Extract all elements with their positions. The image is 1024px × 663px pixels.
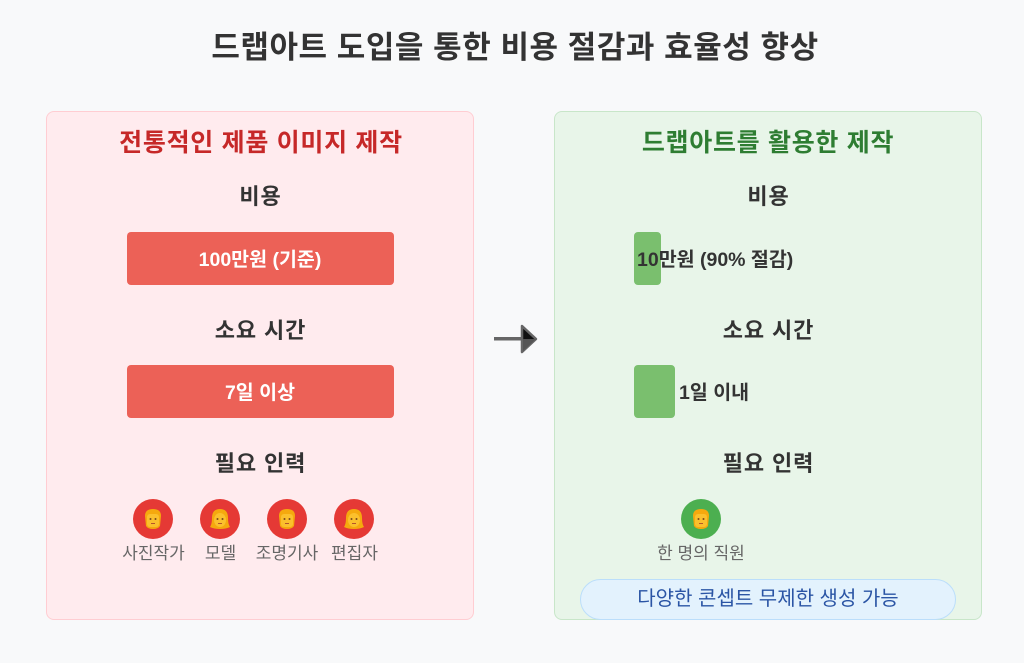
label: lighting technician: 조명기사 xyxy=(256,544,318,563)
label: single employee: 한 명의 직원 xyxy=(657,544,745,563)
arrow xyxy=(494,324,538,354)
bar: dragart cost xyxy=(634,232,661,285)
label: photographer: 사진작가 xyxy=(122,544,185,563)
bar: dragart time xyxy=(634,365,675,418)
icon: photographer xyxy=(133,499,173,539)
callout: unlimited concepts xyxy=(580,579,956,620)
heading: dragart production: 드랩아트를 활용한 제작 xyxy=(642,129,894,157)
heading: traditional staff: 필요 인력 xyxy=(215,451,306,476)
heading: dragart cost: 비용 xyxy=(747,184,790,209)
bar: traditional cost xyxy=(127,232,394,285)
icon: lighting technician xyxy=(267,499,307,539)
title: 드랩아트 도입을 통한 비용 절감과 효율성 향상 xyxy=(211,30,819,65)
heading: traditional production: 전통적인 제품 이미지 제작 xyxy=(119,129,403,157)
panel: traditional production xyxy=(46,111,474,620)
icon: single employee xyxy=(681,499,721,539)
label: editor: 편집자 xyxy=(331,544,378,563)
bar: traditional time xyxy=(127,365,394,418)
bar label: traditional cost: 100만원 (기준) xyxy=(199,249,321,271)
heading: dragart staff: 필요 인력 xyxy=(723,451,814,476)
panel: dragart production xyxy=(554,111,982,620)
heading: dragart time: 소요 시간 xyxy=(723,318,814,343)
bar label: traditional time: 7일 이상 xyxy=(225,382,295,404)
callout: unlimited concepts: 다양한 콘셉트 무제한 생성 가능 xyxy=(637,588,899,610)
heading: traditional time: 소요 시간 xyxy=(215,318,306,343)
icon: model xyxy=(200,499,240,539)
label: model: 모델 xyxy=(205,544,236,563)
bar label: dragart cost: 10만원 (90% 절감) xyxy=(637,249,793,271)
heading: traditional cost: 비용 xyxy=(239,184,282,209)
icon: editor xyxy=(334,499,374,539)
bar label: dragart time: 1일 이내 xyxy=(679,382,749,404)
